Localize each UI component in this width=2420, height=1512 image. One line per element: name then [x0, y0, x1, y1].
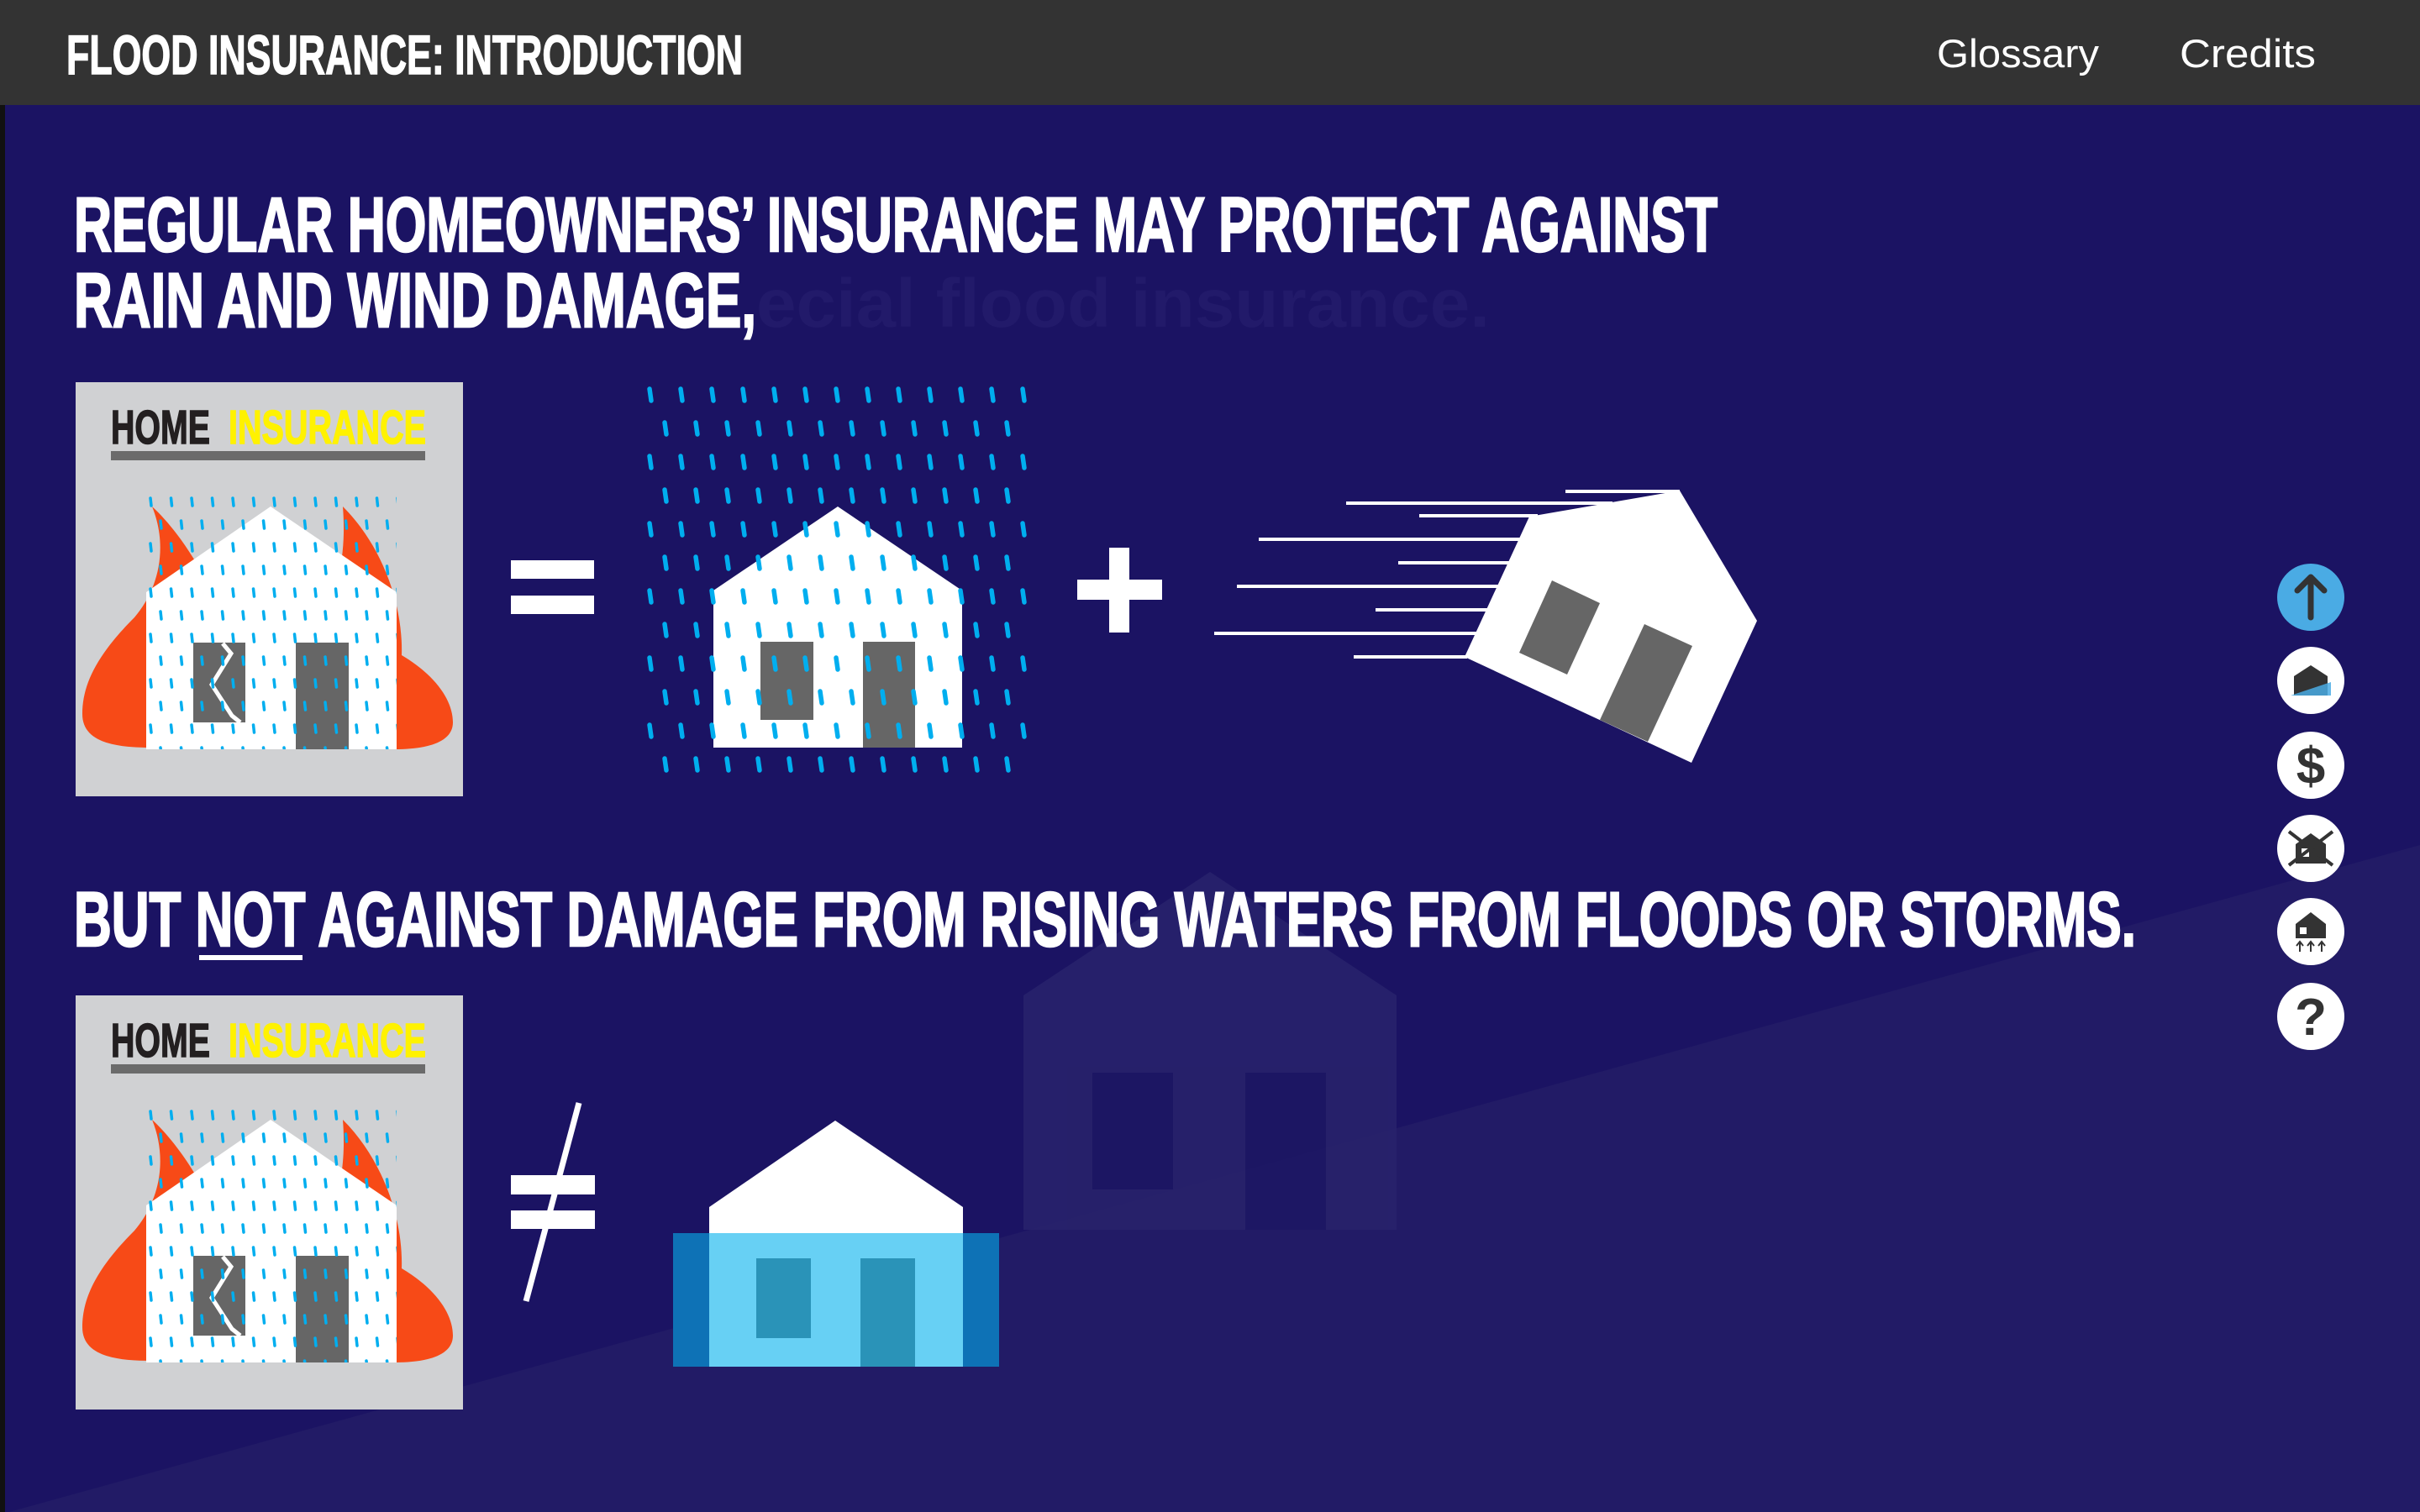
icon: elevated house: [2277, 898, 2344, 965]
nav: credits: Credits: [2180, 31, 2316, 76]
side nav icons: [2277, 564, 2344, 1050]
header title: FLOOD INSURANCE: INTRODUCTION: [66, 24, 743, 86]
icon: dollar: [2277, 732, 2344, 799]
card 2: home insurance: HOME: [111, 1014, 210, 1068]
icon: dollar: $: [2296, 738, 2325, 795]
card 1: home insurance: HOME: [111, 401, 210, 454]
wind-blown house: [1465, 491, 1757, 763]
card 2: home insurance: [76, 995, 463, 1410]
flooded house: [673, 1121, 999, 1367]
not-equal sign: [511, 1103, 595, 1301]
card 1: home insurance: INSURANCE: [229, 401, 426, 454]
ghost text: ecial flood insurance.: [756, 265, 1490, 342]
ghost house background: [1023, 872, 1397, 1230]
equals sign: [511, 560, 594, 614]
nav: glossary: Glossary: [1937, 31, 2100, 76]
icon: up arrow: [2277, 564, 2344, 631]
headline 1: RAIN AND WIND DAMAGE,: [74, 258, 756, 344]
wind speed lines: [1214, 491, 1680, 657]
plus sign: [1077, 548, 1162, 633]
icon: question: [2277, 983, 2344, 1050]
headline 1: [74, 182, 1718, 344]
card 1: home insurance: [76, 382, 463, 796]
rain house: [643, 382, 1028, 776]
header bar: [0, 0, 2420, 105]
card 2: home insurance: INSURANCE: [229, 1014, 426, 1068]
icon: question: ?: [2295, 989, 2327, 1047]
icon: crossed house: [2277, 815, 2344, 882]
icon: flooded house: [2277, 647, 2344, 714]
